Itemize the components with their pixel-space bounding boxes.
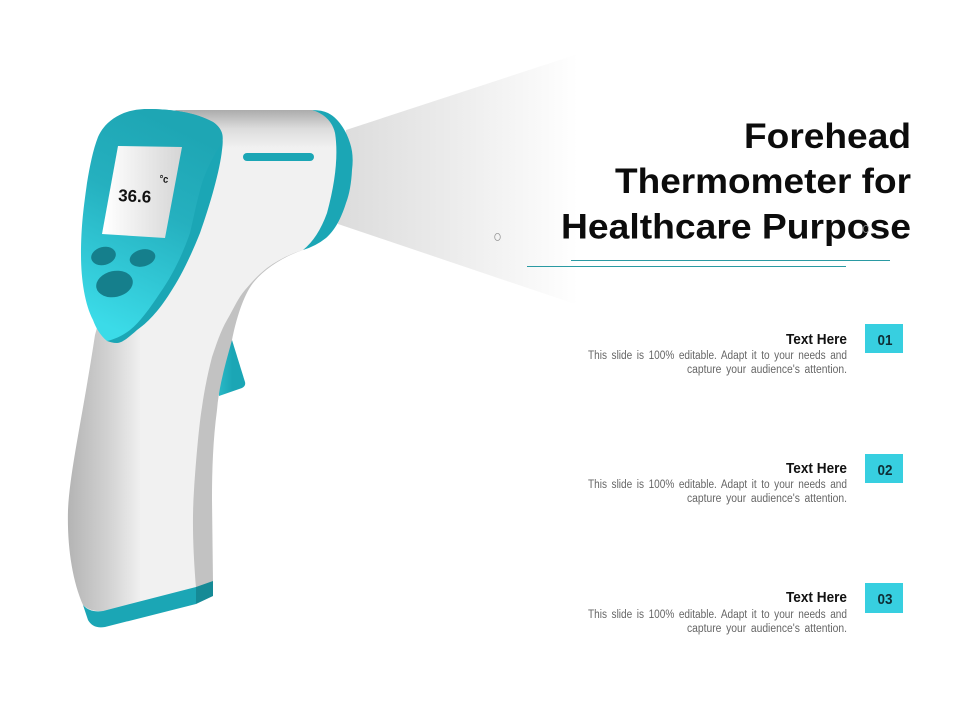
item 3 badge (865, 583, 903, 613)
button right (128, 247, 157, 269)
light beam (338, 54, 578, 305)
item 3 body: This slide is 100% editable. Adapt it to your needs and (588, 609, 847, 621)
item 3 body (588, 609, 847, 635)
thermometer body (68, 110, 336, 611)
title underline (527, 260, 890, 267)
upper body panel (140, 140, 336, 600)
title: Healthcare Purpose (561, 206, 911, 246)
bottom teal band (83, 587, 196, 627)
item 2 badge (865, 454, 903, 483)
item 3 (588, 583, 903, 635)
title (561, 116, 911, 246)
teal nose cap (303, 110, 353, 250)
button left (89, 244, 118, 268)
item 2 body: This slide is 100% editable. Adapt it to your needs and (588, 479, 847, 491)
screen (102, 146, 182, 238)
item 2 heading: Text Here (786, 460, 847, 477)
item 1 body: This slide is 100% editable. Adapt it to your needs and (588, 350, 847, 362)
small circle mark over title (863, 225, 869, 233)
title: Forehead (744, 116, 911, 156)
item 1 body: capture your audience's attention. (687, 364, 847, 376)
item 2 badge: 02 (878, 462, 892, 479)
trigger (215, 340, 245, 396)
item 3 heading: Text Here (786, 589, 847, 606)
item 3 body: capture your audience's attention. (687, 623, 847, 635)
item 1 heading: Text Here (786, 331, 847, 348)
small circle mark (495, 233, 500, 241)
degree unit: °c (159, 173, 169, 186)
button large (94, 267, 135, 301)
bottom band shadow (196, 581, 213, 604)
handle inner shadow strip (193, 250, 303, 588)
face rim (107, 109, 223, 343)
face panel (81, 109, 223, 341)
item 1 body (588, 350, 847, 376)
item 2 body: capture your audience's attention. (687, 493, 847, 505)
temperature reading: 36.6 (118, 186, 152, 207)
item 1 badge: 01 (878, 332, 892, 349)
item 1 (588, 324, 903, 376)
item 2 (588, 454, 903, 505)
top shading (175, 110, 336, 148)
item 3 badge: 03 (878, 591, 892, 608)
slot (243, 153, 314, 161)
thermometer illustration (68, 109, 353, 627)
item 2 body (588, 479, 847, 505)
title: Thermometer for (615, 161, 911, 201)
item 1 badge (865, 324, 903, 353)
